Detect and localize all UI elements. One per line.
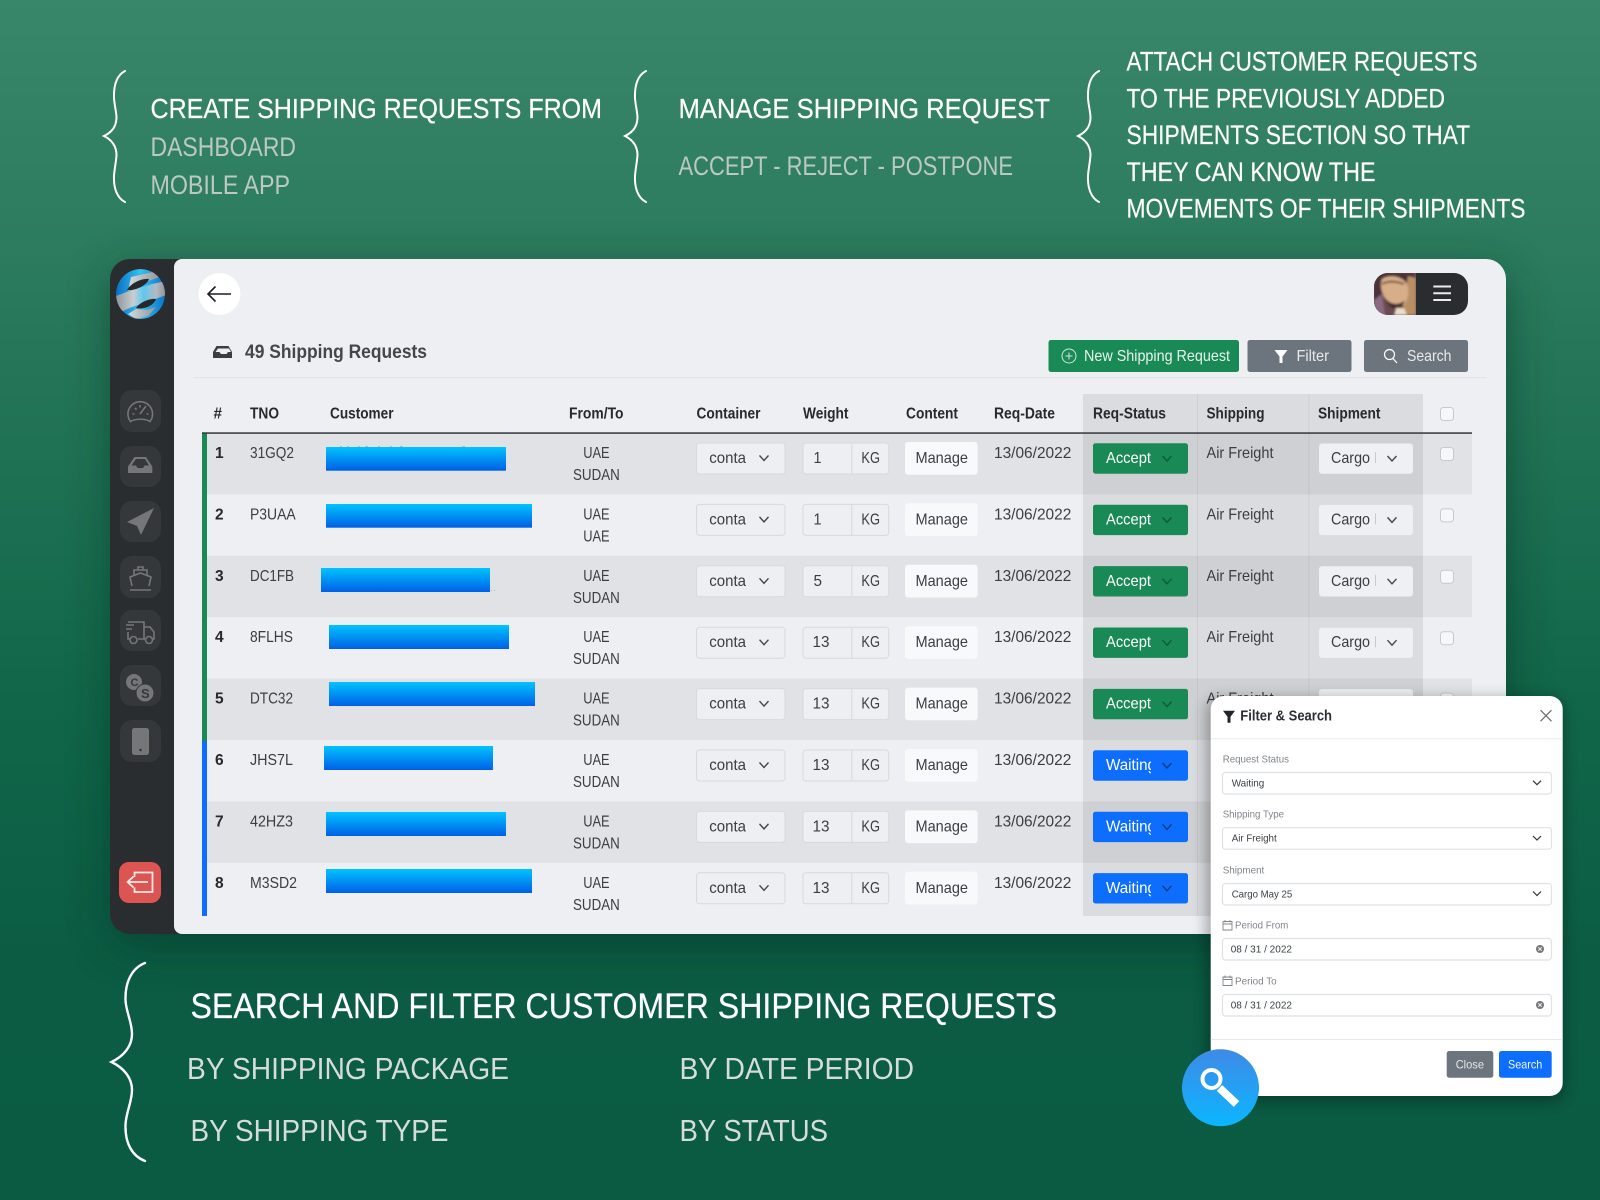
row 5: 13 — [812, 696, 830, 713]
option: mobile app: MOBILE APP — [150, 170, 290, 200]
row 8: Waiting — [1106, 880, 1156, 897]
icon: modal funnel — [1223, 711, 1235, 723]
row 8: Manage — [916, 880, 968, 897]
row 7: conta — [709, 818, 746, 835]
callout: create shipping requests — [104, 71, 602, 202]
table header: Shipping — [1206, 406, 1264, 423]
heading: shipping requests count: 49 Shipping Requests — [245, 341, 427, 363]
row 7 — [215, 810, 1188, 852]
row 3: Air Freight — [1206, 568, 1274, 585]
row 4: 8FLHS — [250, 629, 293, 646]
row 6: Waiting — [1106, 757, 1156, 774]
row 7: 13/06/2022 — [994, 813, 1071, 830]
row 4: UAE — [583, 629, 610, 646]
brace left 2 — [625, 71, 646, 202]
icon: hamburger — [1433, 286, 1451, 300]
row 6: KG — [861, 757, 880, 774]
text block: attach requests — [1126, 47, 1526, 224]
field: request status: Waiting — [1232, 778, 1264, 790]
row 5: UAE — [583, 691, 610, 708]
row 3: 13/06/2022 — [994, 568, 1071, 585]
modal title: Filter & Search — [1240, 709, 1332, 725]
icon: paper plane — [120, 501, 161, 542]
brace left 1 — [104, 71, 125, 202]
row 2: Cargo — [1331, 511, 1370, 528]
row 2: Accept — [1106, 511, 1152, 528]
customer name redaction bars — [321, 447, 535, 893]
text block: attach requests: TO THE PREVIOUSLY ADDED — [1126, 84, 1445, 114]
row 3: KG — [861, 573, 880, 590]
table header: Weight — [803, 406, 848, 423]
modal shadow — [1206, 698, 1564, 1102]
row 1: UAE — [583, 445, 610, 462]
row 6: 6 — [215, 752, 224, 769]
field: shipping type: Shipping Type — [1223, 809, 1284, 821]
row 6: UAE — [583, 752, 610, 769]
row 2: P3UAA — [250, 506, 296, 523]
row 4: 4 — [215, 629, 224, 646]
row 3 — [215, 565, 1454, 607]
field: request status — [1222, 754, 1552, 794]
icon: truck — [120, 610, 161, 651]
button: search — [1364, 340, 1468, 372]
icon: ship — [120, 556, 161, 598]
callout: attach customer requests — [1078, 47, 1526, 224]
row 1: SUDAN — [573, 467, 620, 484]
row 2: 13/06/2022 — [994, 506, 1071, 523]
table header: Req-Status — [1093, 406, 1166, 423]
row 2: KG — [861, 511, 880, 528]
row 2: UAE — [583, 528, 610, 545]
row 3: 3 — [215, 568, 224, 585]
row 8: 13/06/2022 — [994, 875, 1071, 892]
row 1: 1 — [814, 450, 822, 467]
table header: Container — [696, 406, 760, 423]
highlighted status columns — [1083, 394, 1423, 916]
row 2 — [215, 503, 1454, 545]
row 6: Manage — [916, 757, 968, 774]
icon: coins: C — [130, 677, 138, 689]
row 2: UAE — [583, 506, 610, 523]
row 3: SUDAN — [573, 590, 620, 607]
row 8 — [215, 872, 1188, 914]
row 1: Accept — [1106, 450, 1152, 467]
row 1: 1 — [215, 445, 224, 462]
table header: Shipment — [1318, 406, 1380, 423]
option: by shipping package: BY SHIPPING PACKAGE — [187, 1051, 509, 1086]
row 3: UAE — [583, 568, 610, 585]
row 1: KG — [861, 450, 880, 467]
button: logout — [119, 862, 161, 903]
row 4: conta — [709, 634, 746, 651]
row 7: 42HZ3 — [250, 813, 293, 830]
field: period to: 08 / 31 / 2022 — [1231, 1000, 1292, 1012]
row 6: JHS7L — [250, 752, 293, 769]
heading: create shipping requests: CREATE SHIPPING REQUESTS FROM — [150, 93, 602, 124]
row 5: 5 — [215, 691, 224, 708]
row 8: UAE — [583, 875, 610, 892]
row 7: Waiting — [1106, 818, 1156, 835]
app window shadow — [112, 272, 1506, 944]
icon: inbox — [120, 446, 161, 487]
row 2: Manage — [916, 511, 968, 528]
table header: TNO — [250, 406, 279, 423]
sub heading: accept reject postpone: ACCEPT - REJECT - POSTPONE — [678, 151, 1013, 181]
button: modal search: Search — [1508, 1057, 1542, 1071]
table header: From/To — [569, 406, 624, 423]
field: request status: Request Status — [1223, 754, 1289, 766]
row 5: conta — [709, 696, 746, 713]
row 4: SUDAN — [573, 651, 620, 668]
row 1: 31GQ2 — [250, 445, 294, 462]
row 3: Cargo — [1331, 573, 1370, 590]
row 1: Air Freight — [1206, 445, 1274, 462]
row 6 — [215, 749, 1188, 791]
row 6: 13 — [812, 757, 830, 774]
row 7: SUDAN — [573, 835, 620, 852]
row 3: 5 — [814, 573, 822, 590]
field: shipment — [1222, 864, 1552, 905]
row 7: UAE — [583, 813, 610, 830]
row 1: Cargo — [1331, 450, 1370, 467]
row 8: 8 — [215, 875, 224, 892]
row 5: KG — [861, 696, 880, 713]
row 5: 13/06/2022 — [994, 691, 1071, 708]
field: period from: Period From — [1235, 920, 1289, 932]
row 8: SUDAN — [573, 897, 620, 914]
zebra row backgrounds — [207, 433, 1472, 863]
row 1 — [215, 442, 1454, 484]
panel: filter and search modal — [1211, 696, 1563, 1096]
icon: phone — [120, 720, 161, 762]
status strip: accepted rows — [202, 433, 207, 741]
field: shipping type — [1222, 809, 1552, 849]
option: by shipping type: BY SHIPPING TYPE — [190, 1113, 448, 1148]
row 4: Cargo — [1331, 634, 1370, 651]
row 1: conta — [709, 450, 746, 467]
text block: attach requests: ATTACH CUSTOMER REQUESTS — [1126, 47, 1478, 77]
icon: gauge — [120, 390, 161, 432]
row 4: 13 — [812, 634, 830, 651]
row 5 — [215, 688, 1454, 730]
field: period from — [1222, 920, 1552, 960]
row 6: SUDAN — [573, 774, 620, 791]
button: new shipping request: New Shipping Request — [1084, 348, 1230, 365]
row 7: Manage — [916, 818, 968, 835]
text block: attach requests: MOVEMENTS OF THEIR SHIPMENTS — [1126, 194, 1526, 224]
row 2: 2 — [215, 506, 224, 523]
brace left 3 — [1078, 71, 1099, 202]
field: shipping type: Air Freight — [1232, 833, 1277, 845]
table header: Content — [906, 406, 958, 423]
row 6: 13/06/2022 — [994, 752, 1071, 769]
row 8: 13 — [812, 880, 830, 897]
button: search: Search — [1407, 348, 1452, 365]
row 1: Manage — [916, 450, 968, 467]
row 8: KG — [861, 880, 880, 897]
row 7: KG — [861, 818, 880, 835]
panel: main content — [174, 259, 1506, 934]
table: shipping requests — [202, 394, 1472, 916]
icon: logo — [116, 269, 166, 319]
table header: Req-Date — [994, 406, 1055, 423]
row 1: 13/06/2022 — [994, 445, 1071, 462]
table header: Customer — [330, 406, 394, 423]
text block: attach requests: SHIPMENTS SECTION SO THAT — [1126, 120, 1470, 150]
button: filter — [1248, 340, 1352, 372]
button: close: Close — [1456, 1057, 1484, 1071]
text block: attach requests: THEY CAN KNOW THE — [1126, 157, 1376, 187]
row 2: Air Freight — [1206, 506, 1274, 523]
row 5: Accept — [1106, 696, 1152, 713]
button: back — [198, 273, 240, 315]
row 3: Accept — [1106, 573, 1152, 590]
icon: avatar — [1374, 273, 1416, 315]
row 7: 7 — [215, 813, 224, 830]
row 4: KG — [861, 634, 880, 651]
icon: close x — [1540, 710, 1552, 721]
table header — [202, 406, 1472, 434]
row 5: SUDAN — [573, 713, 620, 730]
field: period to — [1222, 976, 1552, 1016]
field: period from: 08 / 31 / 2022 — [1231, 944, 1292, 956]
option: by date period: BY DATE PERIOD — [680, 1051, 914, 1086]
button: filter: Filter — [1296, 348, 1330, 365]
button: new shipping request — [1048, 340, 1239, 372]
row 2: 1 — [814, 511, 822, 528]
icon: magnifier badge — [1182, 1049, 1259, 1126]
row 7: 13 — [812, 818, 830, 835]
residual name specks — [340, 446, 495, 769]
brace left bottom — [112, 963, 145, 1161]
row 4: Air Freight — [1206, 629, 1274, 646]
row 3: conta — [709, 573, 746, 590]
status strip: waiting rows — [202, 741, 207, 916]
row 4: 13/06/2022 — [994, 629, 1071, 646]
row 4: Accept — [1106, 634, 1152, 651]
row 3: DC1FB — [250, 568, 294, 585]
row 6: conta — [709, 757, 746, 774]
callout: manage shipping request — [625, 71, 1050, 202]
icon: title inbox — [213, 346, 232, 358]
row 8: conta — [709, 880, 746, 897]
row 4 — [215, 626, 1454, 668]
user menu pill — [1374, 273, 1468, 315]
option: dashboard: DASHBOARD — [150, 132, 296, 162]
callout: search and filter — [112, 963, 1057, 1161]
row 8: M3SD2 — [250, 875, 297, 892]
table header: # — [214, 406, 222, 423]
button: close — [1447, 1051, 1493, 1078]
icon: coins — [120, 665, 161, 706]
panel: app sidebar — [110, 259, 185, 934]
heading: search and filter: SEARCH AND FILTER CUSTOMER SHIPPING REQUESTS — [190, 987, 1057, 1026]
row 5: Manage — [916, 696, 968, 713]
row 5: DTC32 — [250, 691, 293, 708]
row 4: Manage — [916, 634, 968, 651]
button: modal search — [1499, 1051, 1552, 1078]
row 3: Manage — [916, 573, 968, 590]
option: by status: BY STATUS — [680, 1113, 828, 1148]
row 5: Air Freight — [1206, 691, 1274, 708]
icon: coins: S — [141, 686, 150, 701]
field: period to: Period To — [1235, 976, 1277, 988]
heading: manage shipping request: MANAGE SHIPPING REQUEST — [678, 93, 1050, 124]
field: shipment: Shipment — [1223, 864, 1264, 876]
field: shipment: Cargo May 25 — [1232, 889, 1292, 901]
row 2: conta — [709, 511, 746, 528]
